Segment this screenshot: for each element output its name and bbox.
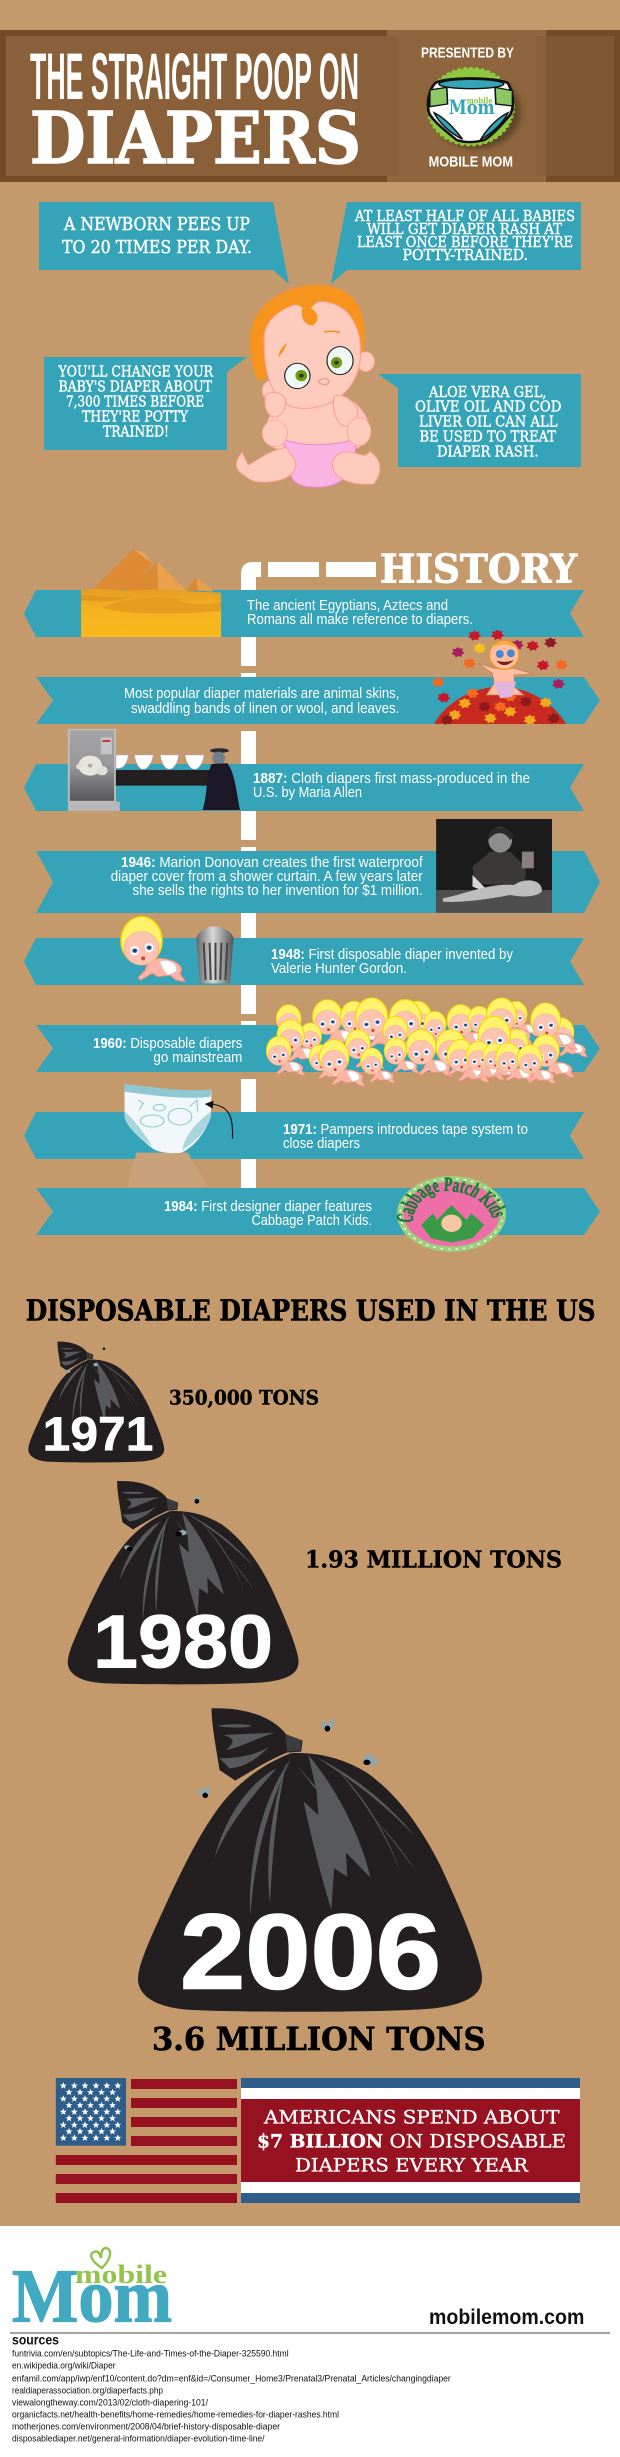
text: close diapers	[283, 1136, 360, 1152]
history heading: HISTORY	[380, 547, 578, 593]
banner: 1948	[24, 917, 584, 985]
callout: diaper rash: POTTY-TRAINED.	[402, 246, 528, 264]
callout: change diaper count	[44, 357, 247, 450]
trash bag: 1971: 1971	[43, 1409, 153, 1462]
trash bag: 2006	[138, 1708, 482, 2012]
header banner	[0, 30, 620, 182]
sources heading: sources	[12, 2331, 59, 2347]
banner: 1960	[36, 998, 600, 1086]
banner: diaper materials	[36, 630, 600, 725]
callout: rash treatments: OLIVE OIL AND COD	[415, 398, 562, 416]
panel: spending fact: AMERICANS SPEND ABOUT	[263, 2106, 560, 2128]
icon: crawling baby and trash can	[121, 917, 234, 983]
icon: taped disposable diaper	[125, 1084, 233, 1187]
sources list: motherjones.com/environment/2008/04/brief-history-disposable-diaper	[12, 2422, 280, 2433]
website: mobilemom.com	[429, 2306, 584, 2329]
panel: spending fact	[241, 2078, 580, 2203]
icon: flies	[195, 1717, 380, 1798]
trash bag: 1980	[68, 1481, 299, 1684]
panel: spending fact: ON DISPOSABLE	[390, 2130, 566, 2152]
mobile mom logo: mobile	[75, 2260, 167, 2289]
callout: change diaper count: TRAINED!	[103, 423, 169, 441]
text: 1946: Marion Donovan creates the first waterproof	[121, 855, 424, 871]
trash bag: 1971	[28, 1342, 164, 1462]
photo: Marion Donovan with baby	[436, 819, 552, 913]
text: Romans all make reference to diapers.	[247, 612, 473, 628]
banner: 1946	[36, 819, 600, 913]
callout: rash treatments: DIAPER RASH.	[437, 443, 538, 461]
text	[93, 1036, 242, 1066]
callout: diaper rash: AT LEAST HALF OF ALL BABIES	[354, 207, 575, 225]
callout: newborn pees: A NEWBORN PEES UP	[63, 215, 250, 235]
presented by: PRESENTED BY	[421, 44, 514, 62]
sources list: enfamil.com/app/iwp/enf10/content.do?dm=enf&id=/Consumer_Home3/Prenatal3/Prenatal_Articles/changingdiaper	[12, 2374, 451, 2385]
callout: change diaper count: BABY'S DIAPER ABOUT	[58, 378, 212, 396]
icon: baby in pink diaper	[236, 285, 380, 487]
callout: change diaper count: 7,300 TIMES BEFORE	[66, 393, 204, 411]
icon: mobile mom diaper badge: mobile	[467, 97, 493, 106]
mobile mom logo: Mom	[12, 2255, 172, 2339]
text: go mainstream	[153, 1050, 242, 1066]
callout: rash treatments: ALOE VERA GEL,	[428, 383, 546, 401]
text: The ancient Egyptians, Aztecs and	[247, 598, 448, 614]
icon: baby in leaf pile	[432, 630, 568, 725]
text: Cabbage Patch Kids.	[252, 1213, 372, 1229]
timeline line	[241, 562, 376, 1188]
callout: rash treatments: LIVER OIL CAN ALL	[419, 413, 558, 431]
text	[283, 1122, 528, 1152]
callout: change diaper count: YOU'LL CHANGE YOUR	[58, 363, 214, 381]
text	[124, 686, 399, 717]
text: 1971: Pampers introduces tape system to	[283, 1122, 528, 1138]
banner: ancient civilizations	[24, 549, 584, 637]
callout: newborn pees	[39, 202, 289, 284]
text	[253, 771, 530, 801]
text	[271, 947, 514, 977]
footer	[0, 2226, 620, 2457]
text: 1948: First disposable diaper invented by	[271, 947, 514, 963]
text	[247, 598, 473, 628]
banner: 1971	[24, 1084, 584, 1187]
stat: 350,000 tons: 350,000 TONS	[169, 1386, 319, 1410]
sources list: en.wikipedia.org/wiki/Diaper	[12, 2361, 116, 2372]
text: swaddling bands of linen or wool, and leaves.	[131, 701, 399, 717]
banner: 1984	[36, 1176, 600, 1252]
icon: cabbage patch kids logo: Cabbage Patch Kids	[396, 1177, 506, 1222]
text: U.S. by Maria Allen	[253, 785, 362, 801]
text	[164, 1199, 372, 1229]
icon: diaper machine and Maria Allen	[68, 730, 240, 811]
sources list: disposablediaper.net/general-information/diaper-evolution-time-line/	[12, 2434, 265, 2445]
callout: newborn pees: TO 20 TIMES PER DAY.	[62, 238, 252, 258]
callout: rash treatments	[378, 374, 581, 467]
text: Most popular diaper materials are animal skins,	[124, 686, 399, 702]
title line 2: DIAPERS	[30, 96, 361, 180]
panel: spending fact: DIAPERS EVERY YEAR	[295, 2154, 529, 2176]
mobile mom label: MOBILE MOM	[429, 154, 513, 171]
heading: disposable diapers used: DISPOSABLE DIAPERS USED IN THE US	[26, 1294, 595, 1328]
panel: spending fact: $7 BILLION	[257, 2130, 383, 2152]
sources list: funtrivia.com/en/subtopics/The-Life-and-Times-of-the-Diaper-325590.html	[12, 2349, 289, 2360]
sources list: viewalongtheway.com/2013/02/cloth-diapering-101/	[12, 2398, 208, 2409]
icon: desert pyramids	[81, 549, 221, 637]
stat: 3.6 million tons: 3.6 MILLION TONS	[152, 2020, 486, 2058]
text: she sells the rights to her invention for $1 million.	[132, 883, 423, 899]
trash bag: 2006: 2006	[180, 1891, 441, 2011]
sources list: organicfacts.net/health-benefits/home-remedies/home-remedies-for-diaper-rashes.html	[12, 2410, 339, 2421]
callout: change diaper count: THEY'RE POTTY	[82, 408, 189, 426]
text: Valerie Hunter Gordon.	[271, 961, 407, 977]
icon: american flag	[56, 2078, 237, 2203]
icon: crowd of crawling babies	[266, 998, 588, 1086]
text: 1984: First designer diaper features	[164, 1199, 372, 1215]
text	[111, 855, 424, 899]
callout: diaper rash	[331, 202, 581, 284]
text: 1887: Cloth diapers first mass-produced in the	[253, 771, 530, 787]
stat: 1.93 million tons: 1.93 MILLION TONS	[305, 1546, 562, 1573]
icon: cabbage patch kids logo	[396, 1176, 506, 1252]
sources list	[12, 2349, 451, 2445]
callout: diaper rash: WILL GET DIAPER RASH AT	[367, 220, 562, 238]
sources list: realdiaperassociation.org/diaperfacts.php	[12, 2386, 163, 2397]
text: 1960: Disposable diapers	[93, 1036, 242, 1052]
text: diaper cover from a shower curtain. A few years later	[111, 869, 423, 885]
banner: 1887	[24, 730, 584, 811]
callout: rash treatments: BE USED TO TREAT	[420, 428, 556, 446]
trash bag: 1980: 1980	[93, 1600, 273, 1684]
icon: mobile mom diaper badge	[428, 68, 521, 149]
icon: mobile mom diaper badge: Mom	[449, 96, 495, 119]
callout: diaper rash: LEAST ONCE BEFORE THEY'RE	[357, 233, 573, 251]
